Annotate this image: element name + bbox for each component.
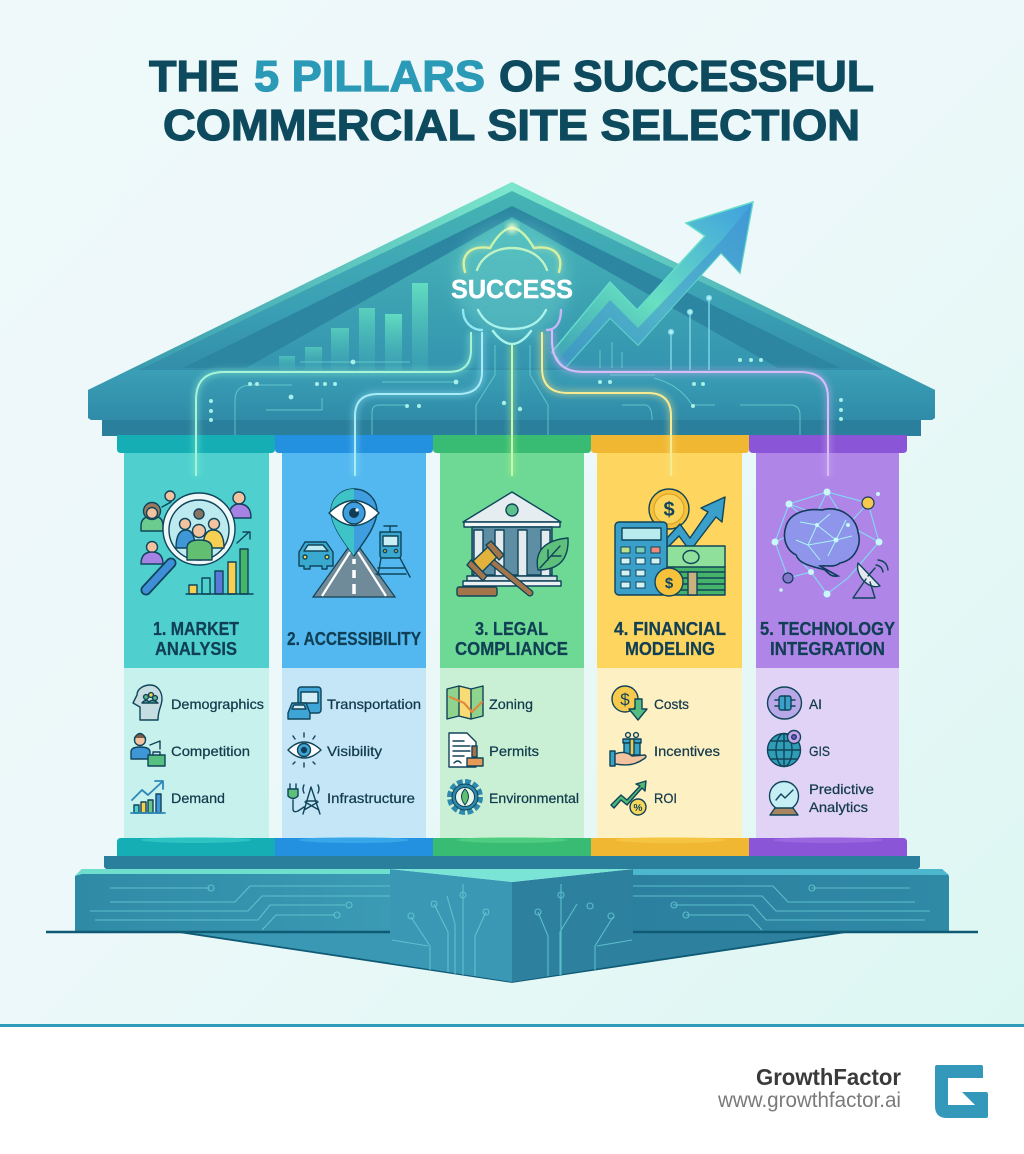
list: financial modeling: ROI xyxy=(654,790,677,806)
icon: financial modeling xyxy=(615,489,725,596)
rising arrow xyxy=(667,497,725,551)
list: market analysis: Demographics xyxy=(171,696,264,712)
column three shaft xyxy=(440,453,584,839)
list: market analysis xyxy=(131,685,264,813)
pillar headings: COMPLIANCE xyxy=(455,639,568,659)
list: financial modeling: Costs xyxy=(654,696,689,712)
connector lines xyxy=(196,330,828,476)
list: financial modeling xyxy=(610,686,720,815)
success emblem xyxy=(451,222,573,344)
list: technology integration: Analytics xyxy=(809,799,868,815)
handle xyxy=(146,563,171,590)
list: technology integration: GIS xyxy=(809,743,830,759)
growth bars xyxy=(186,532,253,594)
footer xyxy=(0,1024,1024,1154)
courthouse xyxy=(463,492,561,586)
title: COMMERCIAL SITE SELECTION xyxy=(163,101,860,150)
pillar headings: 1. MARKET xyxy=(153,619,239,639)
base circuits xyxy=(90,884,930,976)
temple base xyxy=(46,856,978,982)
icon: map xyxy=(447,686,483,719)
eye xyxy=(329,500,379,526)
column five shaft xyxy=(756,453,899,839)
lower coin xyxy=(655,568,683,596)
title: OF SUCCESSFUL xyxy=(499,52,874,101)
icon: technology integration xyxy=(772,488,888,598)
icon: competition xyxy=(131,734,165,766)
entablature xyxy=(88,370,935,420)
icon: financial modeling: $ xyxy=(665,575,674,592)
website: www.growthfactor.ai xyxy=(717,1089,901,1112)
circuit decorations xyxy=(235,342,800,435)
leaf xyxy=(537,538,568,570)
pillar headings: 2. ACCESSIBILITY xyxy=(287,629,421,649)
ground line xyxy=(46,931,978,933)
icon: costs: $ xyxy=(620,690,630,709)
icon: demographics head xyxy=(133,685,162,720)
icon: environmental gear xyxy=(450,782,480,812)
icon: ai brain xyxy=(768,687,802,719)
list: accessibility: Transportation xyxy=(327,696,421,712)
icon: permit document xyxy=(449,733,483,767)
list: accessibility: Visibility xyxy=(327,743,382,759)
icon: legal compliance xyxy=(457,492,568,596)
list: legal compliance xyxy=(447,686,579,812)
temple roof xyxy=(88,182,935,436)
circuit dots xyxy=(209,358,843,422)
list: legal compliance: Zoning xyxy=(489,696,533,712)
icon: predictive crystal ball xyxy=(770,782,798,815)
title: 5 PILLARS xyxy=(254,52,485,101)
logo xyxy=(935,1065,988,1118)
icon: gis globe xyxy=(768,730,800,766)
list: market analysis: Competition xyxy=(171,743,250,759)
icon: visibility eye xyxy=(288,733,321,767)
brain xyxy=(784,509,859,576)
left step xyxy=(75,869,390,931)
car xyxy=(299,542,333,569)
location pin xyxy=(331,489,377,556)
network nodes xyxy=(772,488,882,598)
icon: financial modeling: $ xyxy=(663,499,675,521)
train xyxy=(376,526,410,577)
list: legal compliance: Environmental xyxy=(489,790,579,806)
lower cornice band xyxy=(102,420,921,436)
connector lines core xyxy=(196,330,828,476)
road xyxy=(313,548,395,597)
pillar headings: ANALYSIS xyxy=(155,639,237,659)
lens xyxy=(163,493,235,565)
list: accessibility xyxy=(288,687,421,814)
brand name: GrowthFactor xyxy=(756,1064,901,1090)
icon: infrastructure xyxy=(288,784,320,814)
people around the lens xyxy=(141,491,251,564)
success label: SUCCESS xyxy=(451,274,573,304)
gavel xyxy=(457,541,530,596)
list: market analysis: Demand xyxy=(171,790,225,806)
list: accessibility: Infrastructure xyxy=(327,790,415,806)
icon: roi: % xyxy=(634,803,643,814)
column four shaft xyxy=(597,453,742,839)
pillar headings xyxy=(153,619,895,659)
column two shaft xyxy=(282,453,426,839)
network xyxy=(775,492,879,594)
calculator xyxy=(615,522,667,595)
list: financial modeling: Incentives xyxy=(654,743,720,759)
pillar headings: 4. FINANCIAL xyxy=(614,619,726,639)
pillar headings: INTEGRATION xyxy=(770,639,885,659)
plinth band xyxy=(104,856,920,869)
right step xyxy=(633,869,949,931)
cash stack xyxy=(667,546,725,595)
signal posts xyxy=(669,296,711,370)
list: legal compliance: Permits xyxy=(489,743,539,759)
icon: bus and car xyxy=(288,687,321,719)
icon: accessibility xyxy=(299,489,410,597)
centre block xyxy=(390,869,512,982)
pillar headings: 3. LEGAL xyxy=(475,619,548,639)
list: technology integration: AI xyxy=(809,696,822,712)
icon: market analysis xyxy=(141,491,253,594)
satellite dish xyxy=(853,560,888,598)
icon: incentives xyxy=(610,733,646,766)
column capitals xyxy=(117,435,907,453)
top coin xyxy=(649,489,689,529)
pediment bar chart xyxy=(279,283,428,370)
column bases xyxy=(117,837,907,856)
lower wedge xyxy=(179,932,512,982)
title xyxy=(149,52,874,150)
list: technology integration: Predictive xyxy=(809,781,874,797)
group in lens xyxy=(176,509,224,560)
growth arrow xyxy=(552,202,753,368)
pillar headings: MODELING xyxy=(625,639,715,659)
title: THE xyxy=(149,52,239,101)
icon: demand xyxy=(131,781,165,813)
list: technology integration xyxy=(768,687,874,815)
pillar headings: 5. TECHNOLOGY xyxy=(760,619,895,639)
column one shaft xyxy=(124,453,269,839)
